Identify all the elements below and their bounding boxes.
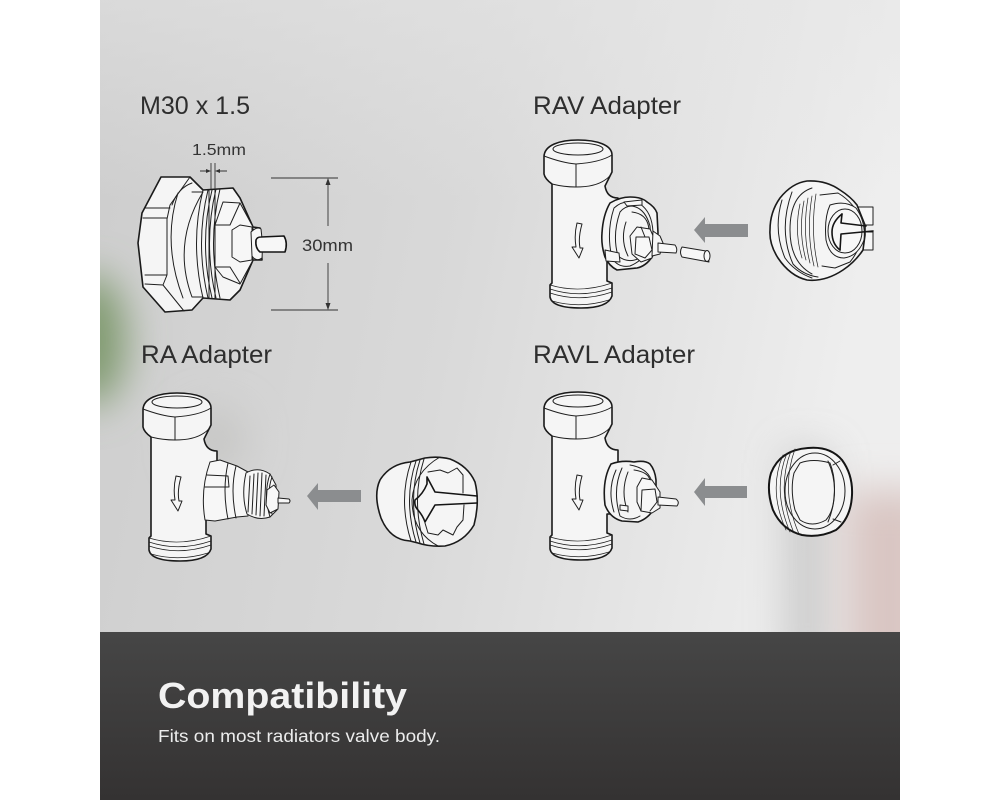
title: RAVL Adapter: RAVL Adapter — [533, 341, 695, 369]
title: RA Adapter: RA Adapter — [141, 341, 272, 369]
dimension: 30mm: 30mm — [302, 236, 353, 255]
arrow — [694, 217, 748, 243]
heading: Compatibility: Compatibility — [158, 675, 407, 716]
diagram: RAV valve body — [544, 140, 677, 308]
title: M30 x 1.5: M30 x 1.5 — [140, 92, 250, 120]
description: Fits on most radiators valve body. — [158, 726, 440, 746]
part: RAVL adapter — [769, 448, 852, 536]
diagram: RAVL valve body — [544, 392, 678, 560]
diagram: RA valve body — [143, 393, 290, 561]
part: RA adapter — [377, 457, 477, 546]
title: RAV Adapter: RAV Adapter — [533, 92, 681, 120]
arrow — [694, 478, 747, 506]
bottom band — [100, 632, 900, 800]
background panel — [100, 0, 900, 632]
dimension: 30mm — [271, 178, 353, 310]
dimension: 1.5mm: 1.5mm — [192, 142, 246, 159]
arrow — [307, 483, 361, 510]
diagram: M30 thread connector — [138, 177, 286, 312]
dimension: 1.5mm — [192, 142, 246, 189]
part: RAV adapter — [770, 181, 873, 280]
part: RAV sleeve — [680, 247, 710, 262]
